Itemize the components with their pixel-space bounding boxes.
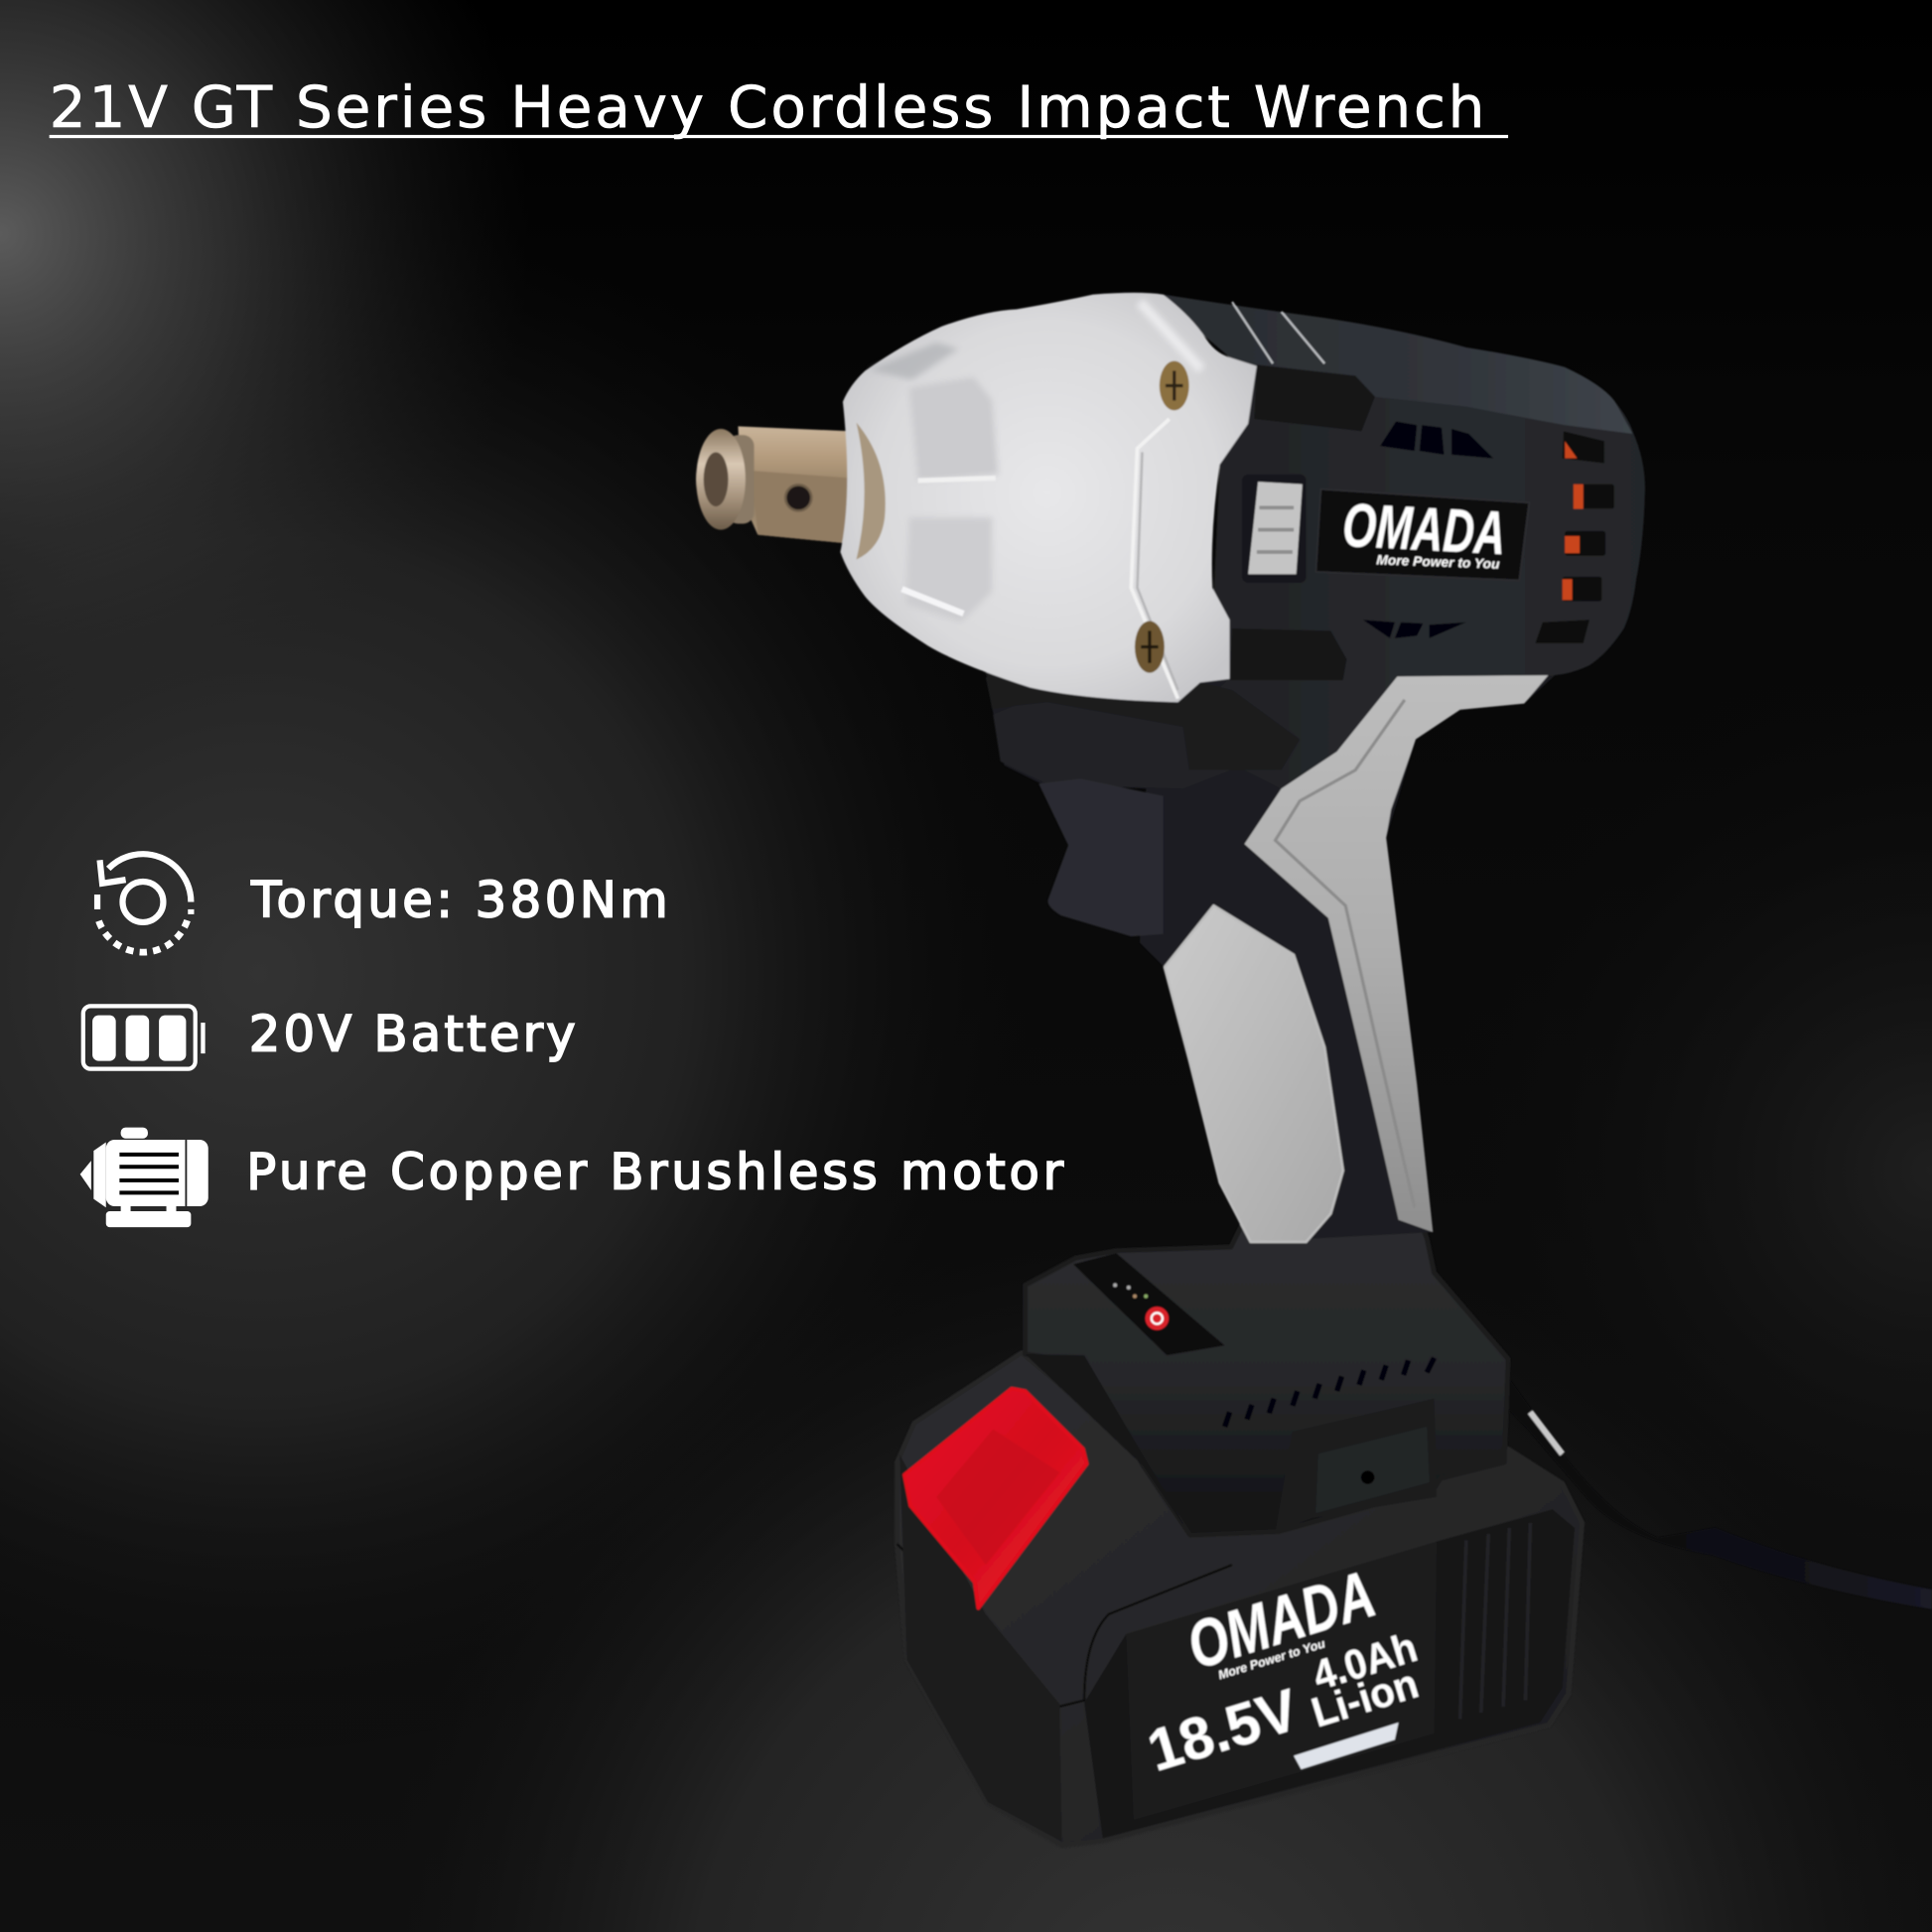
icon: motor	[80, 1128, 208, 1227]
battery label	[1126, 1542, 1437, 1820]
battery label: Li-ion	[1307, 1660, 1424, 1736]
battery rib panel	[1460, 1523, 1530, 1719]
head recesses	[909, 377, 998, 481]
socket collar in head	[857, 423, 886, 559]
power selector switch	[1242, 475, 1307, 583]
feature: battery: 20V Battery	[249, 1006, 576, 1063]
lanyard strap	[1498, 1374, 1932, 1609]
brand plate: More Power to You	[1376, 552, 1500, 572]
feature: torque	[97, 854, 668, 952]
title: 21V GT Series Heavy Cordless Impact Wrench	[50, 73, 1484, 141]
red release button	[904, 1389, 1087, 1608]
top cylinder	[1164, 295, 1632, 434]
feature: motor: Pure Copper Brushless motor	[246, 1144, 1064, 1201]
brand plate	[1315, 489, 1529, 581]
LED panel	[1073, 1253, 1225, 1355]
feature: battery	[83, 1006, 576, 1069]
battery label: OMADA	[1179, 1557, 1383, 1684]
white gear head	[840, 293, 1257, 702]
icon: battery	[83, 1006, 206, 1069]
battery latch clip	[1276, 1399, 1437, 1532]
battery label: More Power to You	[1216, 1636, 1327, 1682]
vent slits	[1225, 1358, 1435, 1427]
battery label: 4.0Ah	[1308, 1623, 1423, 1699]
feature: motor	[80, 1128, 1064, 1227]
back strip	[1244, 670, 1553, 1232]
handle	[986, 617, 1555, 1242]
grip	[1165, 905, 1343, 1242]
icon: torque	[97, 854, 191, 952]
motor housing	[1164, 295, 1645, 788]
rear vents	[1535, 431, 1614, 643]
screws	[1135, 361, 1189, 673]
feature: torque: Torque: 380Nm	[250, 871, 668, 928]
black blocks	[1254, 364, 1375, 431]
anvil and socket	[696, 423, 889, 558]
battery label: 18.5V	[1140, 1676, 1306, 1784]
foot with LED panel	[1026, 1213, 1508, 1535]
collar shadow	[986, 671, 1300, 770]
feature list	[80, 854, 1064, 1227]
battery pack	[897, 1353, 1583, 1846]
brand plate: OMADA	[1341, 491, 1507, 568]
trigger	[1038, 778, 1164, 936]
vents	[1363, 421, 1493, 638]
head ridge	[1131, 419, 1177, 699]
impact wrench	[696, 293, 1932, 1846]
